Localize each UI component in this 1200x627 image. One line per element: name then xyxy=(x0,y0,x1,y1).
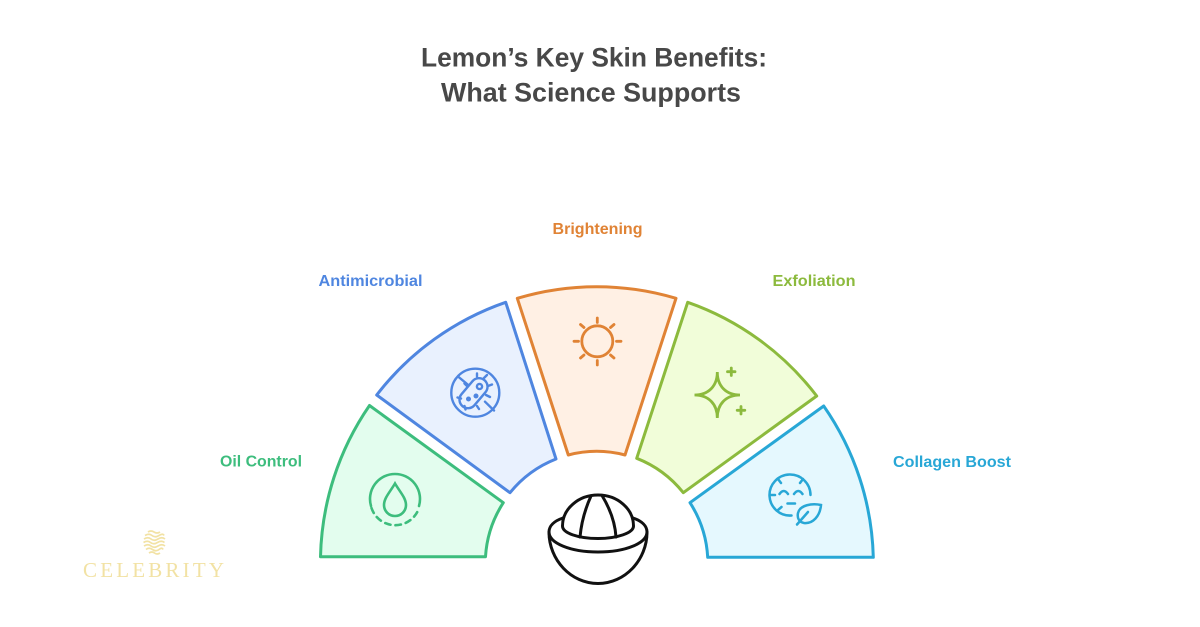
icon: lemon squeezer xyxy=(549,495,647,584)
label: brightening: Brightening xyxy=(552,221,642,238)
panel: collagen boost xyxy=(690,406,1012,557)
logo: celebrity xyxy=(83,531,224,582)
title: Lemon’s Key Skin Benefits: xyxy=(421,42,767,72)
label: oil control: Oil Control xyxy=(220,454,302,470)
panel: antimicrobial xyxy=(318,273,556,493)
logo wordmark: CELEBRITY xyxy=(83,558,224,582)
icon: face with leaf xyxy=(770,475,821,524)
icon: logo waves xyxy=(144,531,165,554)
panel: oil control xyxy=(220,406,503,557)
label: collagen boost: Collagen Boost xyxy=(893,454,1012,471)
panel: exfoliation xyxy=(637,273,856,493)
label: exfoliation: Exfoliation xyxy=(772,273,856,290)
label: antimicrobial: Antimicrobial xyxy=(318,273,422,290)
panel: brightening xyxy=(517,221,676,455)
icon: crossed bacteria xyxy=(451,369,499,417)
icon: sun xyxy=(574,318,621,365)
icon: sparkle xyxy=(694,368,745,418)
title: What Science Supports xyxy=(441,78,741,108)
title xyxy=(421,42,767,108)
icon: oil drop xyxy=(370,474,420,525)
